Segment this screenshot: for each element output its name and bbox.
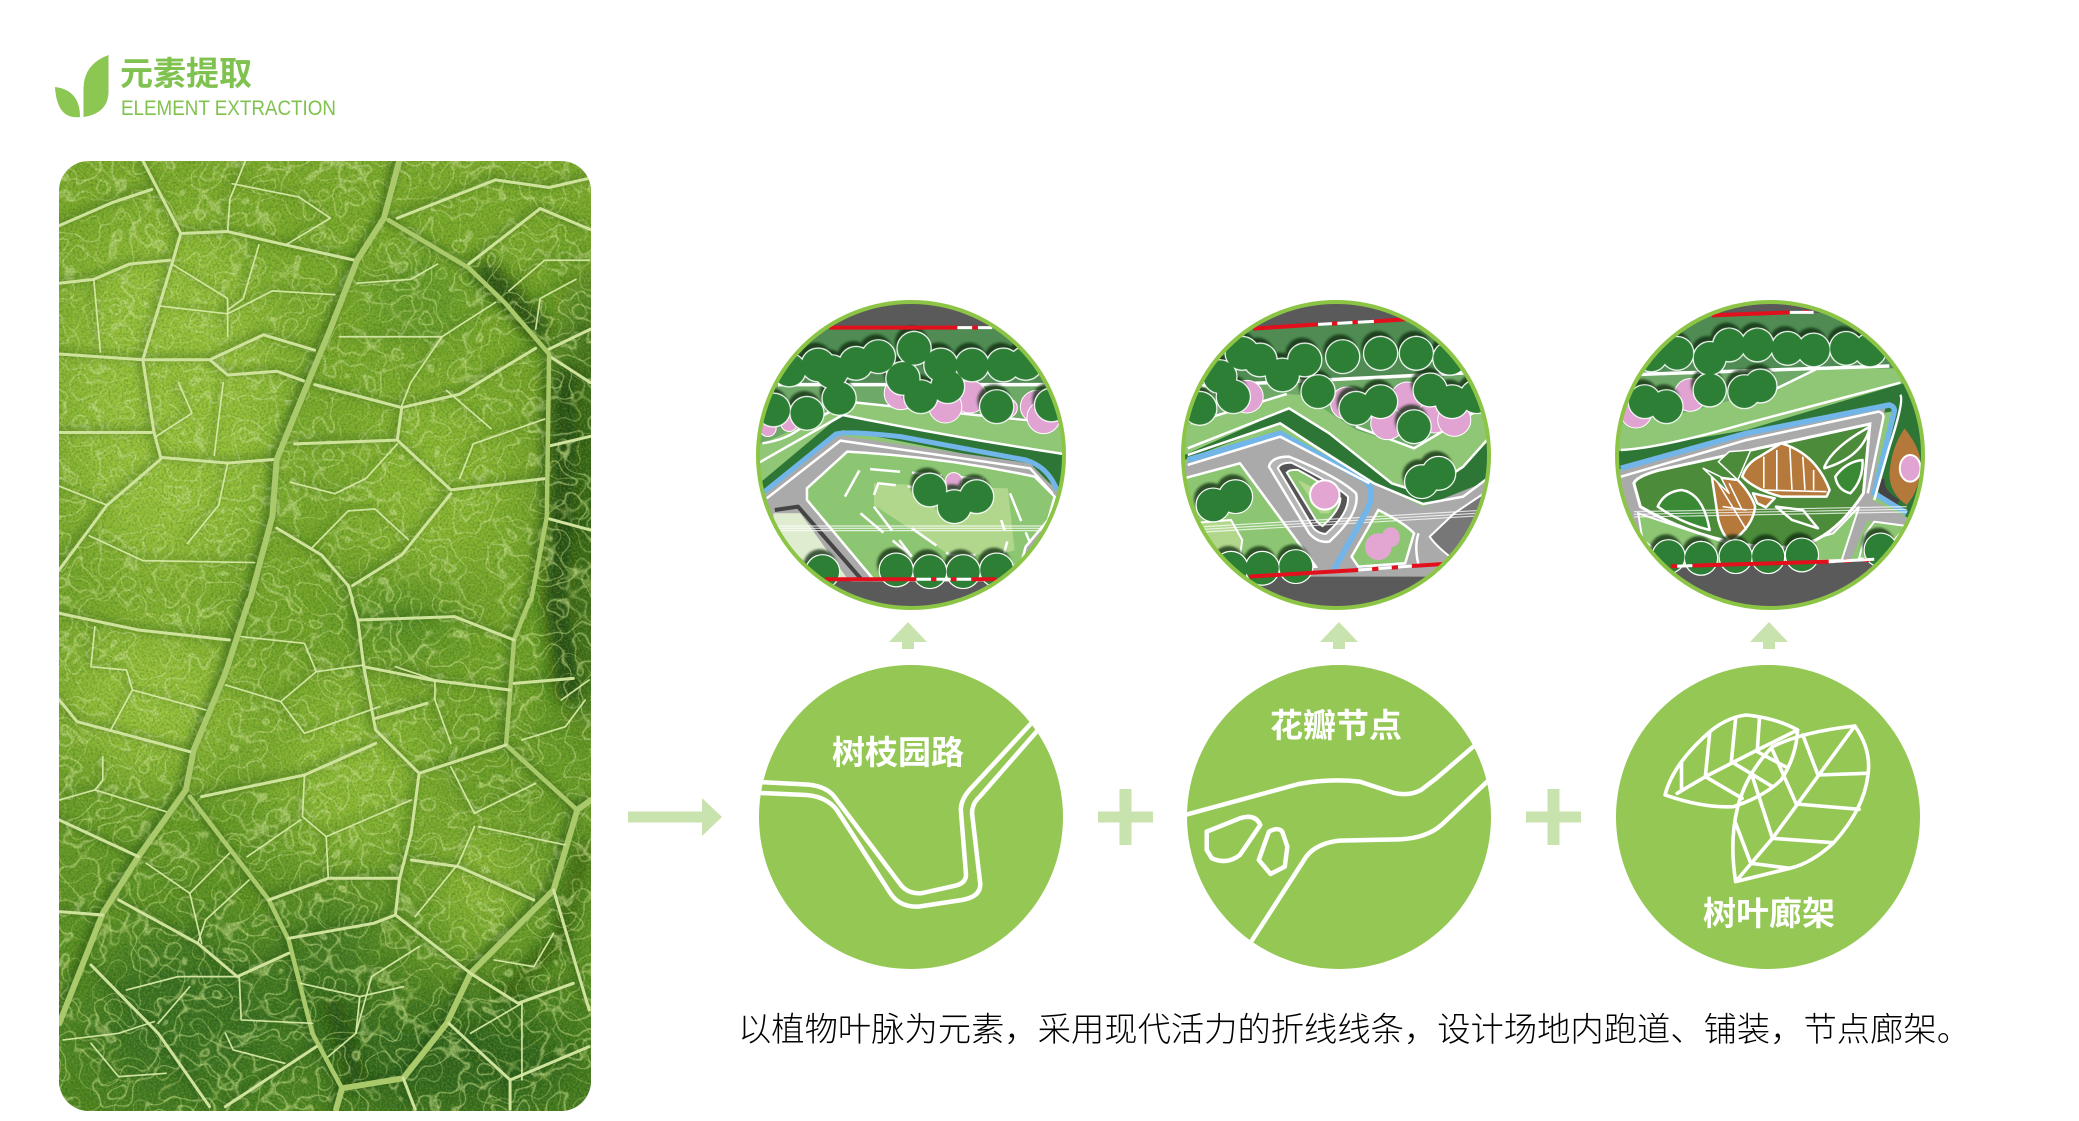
- arrow up 3: [1750, 622, 1788, 649]
- brown leaf pavilion roofs: [1658, 427, 1870, 542]
- tree shadows: [774, 325, 1046, 574]
- leaf light stipple texture: [59, 161, 591, 1111]
- icon: green leaf logo: [55, 55, 108, 117]
- leaf fine vein network: [59, 161, 591, 1111]
- arrow: leaf to elements: [628, 798, 722, 836]
- element circle: petal node: [1181, 665, 1492, 969]
- leaf second vein network: [59, 161, 591, 1111]
- aerial ring 2: [1183, 302, 1489, 608]
- subtitle: ELEMENT EXTRACTION: [121, 97, 336, 120]
- label: 树叶廊架: [1703, 895, 1835, 932]
- tree outlines: [1183, 337, 1493, 585]
- petal node lines: [1181, 743, 1492, 943]
- aerial circle: petal node: [1185, 304, 1487, 606]
- aerial circle: leaf pavilion: [1619, 304, 1921, 606]
- leaf veins lower half: [59, 600, 591, 1109]
- pink flowering trees: [1230, 380, 1471, 440]
- arrow up 1: [889, 622, 927, 649]
- tree outlines: [757, 332, 1068, 588]
- header block: [55, 55, 336, 120]
- panel: leaf vein photo: [59, 160, 634, 1120]
- title: 元素提取: [120, 55, 252, 92]
- branch path lines: [753, 718, 1041, 907]
- element circle: branch path: [753, 665, 1063, 969]
- aerial ring 3: [1617, 302, 1923, 608]
- tree outlines: [1629, 329, 1897, 575]
- element circle: leaf pavilion: [1616, 665, 1920, 969]
- leaf dark stipple texture: [59, 161, 591, 1111]
- arrow up 2: [1320, 622, 1358, 649]
- plus sign 2: [1526, 789, 1581, 845]
- icon: two outlined leaves: [1665, 715, 1869, 882]
- pink flowering trees: [760, 377, 1060, 489]
- leaf dark shadow beside ribs: [330, 265, 585, 1090]
- label: 树枝园路: [832, 734, 964, 771]
- label: 花瓣节点: [1270, 707, 1402, 744]
- tree shadows: [1192, 330, 1468, 562]
- green tree canopies: [1183, 337, 1493, 585]
- leaf light and shadow patches: [60, 220, 634, 1120]
- caption: 以植物叶脉为元素，采用现代活力的折线线条，设计场地内跑道、铺装，节点廊架。: [738, 1012, 1970, 1049]
- green tree canopies: [757, 332, 1068, 588]
- plus sign 1: [1098, 789, 1153, 845]
- tree shadows: [1626, 323, 1894, 569]
- leaf veins upper half: [59, 160, 591, 600]
- aerial circle: branch garden path: [760, 304, 1062, 606]
- pink flowering trees: [1620, 379, 1706, 428]
- leaf vein network: [59, 160, 591, 1109]
- aerial ring 1: [758, 302, 1064, 608]
- green tree canopies: [1629, 329, 1897, 575]
